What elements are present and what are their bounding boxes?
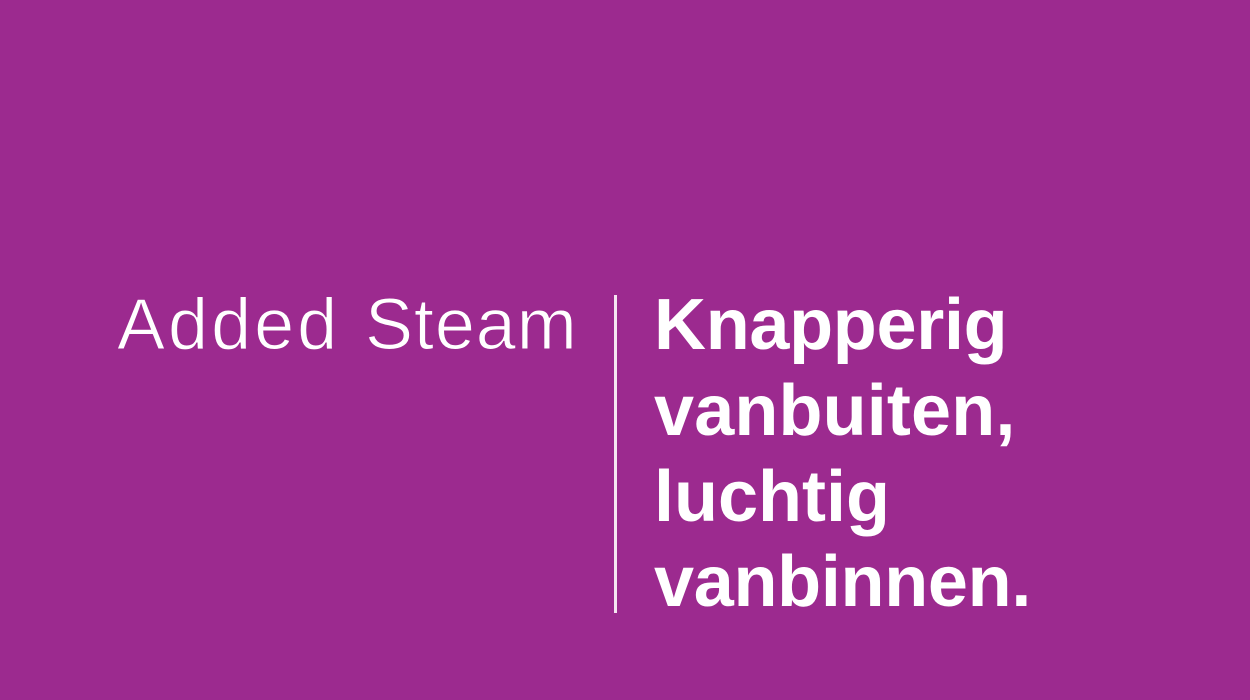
label: Added Steam: Steam <box>365 285 578 365</box>
label: Added Steam: Added <box>117 285 340 365</box>
headline: vanbuiten, <box>654 371 1016 451</box>
headline: Knapperig <box>654 285 1007 365</box>
headline <box>654 285 1031 622</box>
headline: vanbinnen. <box>654 542 1031 622</box>
vertical divider <box>614 295 617 613</box>
label: Added Steam <box>117 285 578 365</box>
headline: luchtig <box>654 457 890 537</box>
